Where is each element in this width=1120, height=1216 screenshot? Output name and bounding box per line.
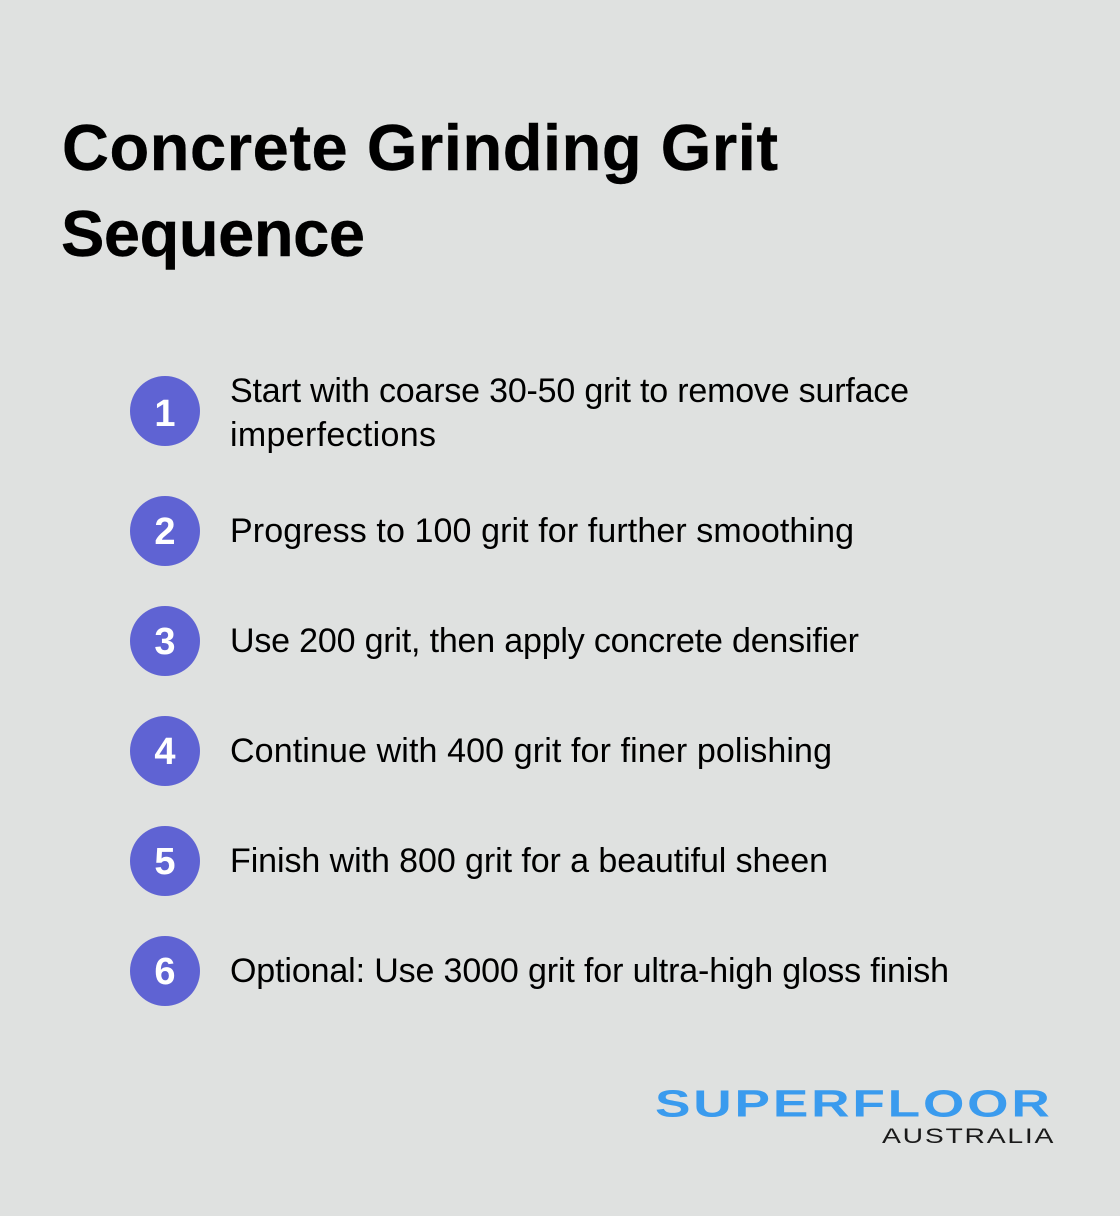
logo — [655, 1082, 1054, 1148]
step 3 badge — [130, 606, 200, 676]
step 6 text: Optional: Use 3000 grit for ultra-high gloss finish — [230, 952, 949, 990]
step 4 — [130, 716, 832, 786]
title: Concrete Grinding Grit — [62, 111, 778, 184]
step 3 text: Use 200 grit, then apply concrete densifier — [230, 622, 859, 660]
step 2 — [130, 496, 854, 566]
step 1 text — [230, 372, 909, 454]
title: Sequence — [61, 197, 365, 270]
logo wordmark: SUPERFLOOR — [655, 1082, 1050, 1125]
step 2 text: Progress to 100 grit for further smoothing — [230, 512, 854, 550]
step 6 badge: 6 — [154, 951, 176, 993]
title — [61, 111, 778, 270]
step 5 badge — [130, 826, 200, 896]
step 5 badge: 5 — [154, 841, 176, 883]
step 1 text: imperfections — [230, 416, 436, 454]
step 1 text: Start with coarse 30-50 grit to remove surface — [230, 372, 909, 410]
step 2 badge: 2 — [154, 511, 176, 553]
step 2 badge — [130, 496, 200, 566]
step 6 badge — [130, 936, 200, 1006]
step 1 — [130, 372, 909, 454]
step 3 badge: 3 — [154, 621, 176, 663]
step 1 badge — [130, 376, 200, 446]
step 5 text: Finish with 800 grit for a beautiful sheen — [230, 842, 828, 880]
step 4 badge — [130, 716, 200, 786]
logo subtitle: AUSTRALIA — [882, 1124, 1054, 1148]
step 4 badge: 4 — [154, 731, 176, 773]
step 5 — [130, 826, 828, 896]
step 4 text: Continue with 400 grit for finer polishing — [230, 732, 832, 770]
step 1 badge: 1 — [154, 393, 176, 435]
step 6 — [130, 936, 949, 1006]
step 3 — [130, 606, 859, 676]
